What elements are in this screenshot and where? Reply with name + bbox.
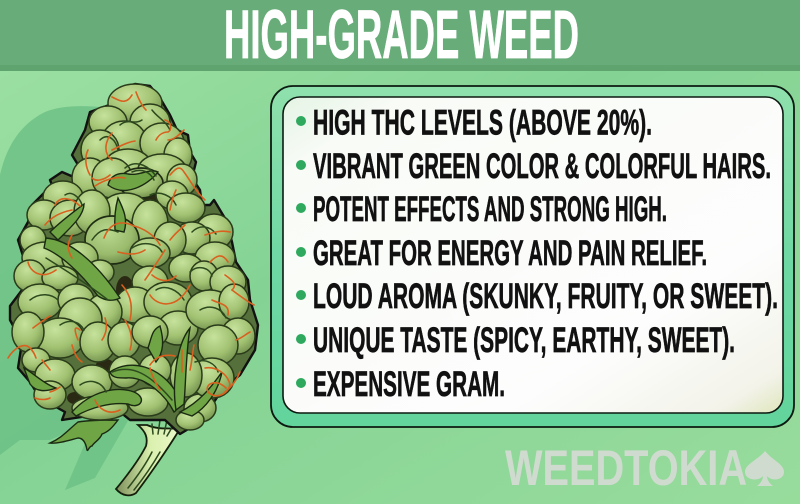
header band [0,0,800,73]
bud vein lines [30,110,226,400]
illustration: cannabis bud [8,84,258,495]
bud stem [116,420,179,495]
bud dark hollows [33,191,158,404]
list item: THC [296,102,652,142]
list item: price [296,364,505,404]
bud flowers: lower [12,282,255,430]
bud orange hairs [8,92,254,412]
panel: characteristics list [271,86,794,427]
background shadow silhouette [0,106,140,490]
bud flowers: middle [14,181,246,323]
panel outer frame [271,86,794,427]
panel inner card [283,97,783,413]
lower leaf [50,420,118,450]
bud flowers: top cola [72,84,205,223]
icon: spade [745,451,784,486]
bud leaves [24,171,222,416]
bud silhouette [10,84,258,434]
list item: price: EXPENSIVE GRAM. [313,364,505,404]
